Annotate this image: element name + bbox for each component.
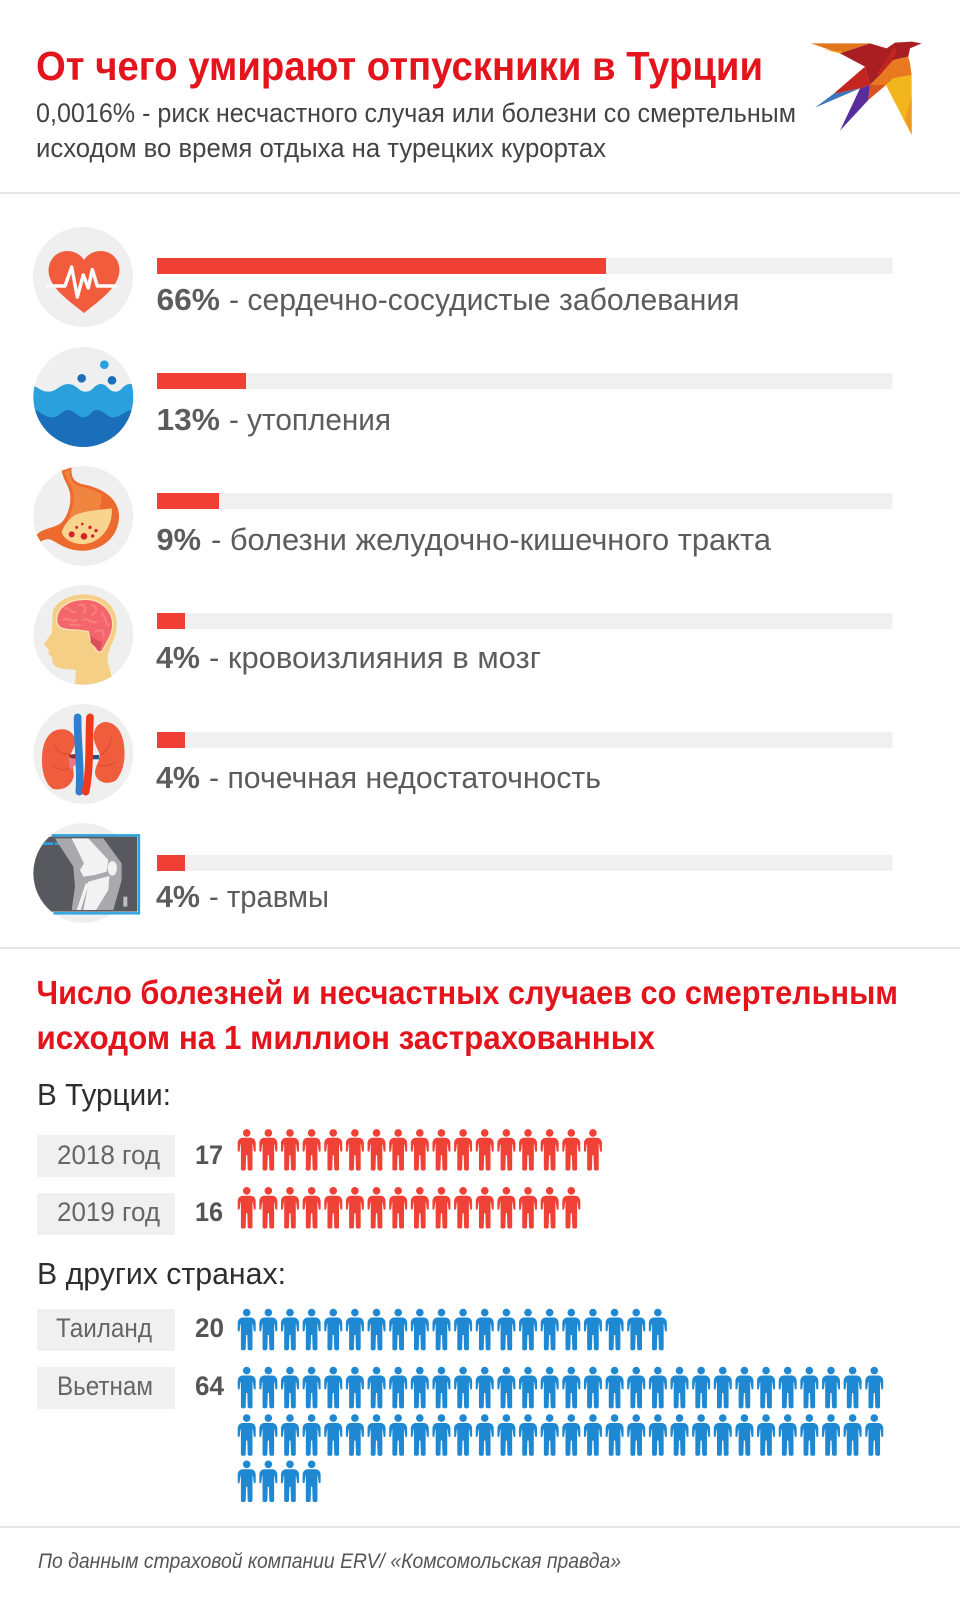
row: Vietnam	[37, 1367, 883, 1502]
value: 20: 20	[195, 1313, 224, 1343]
icon: brain	[33, 585, 133, 685]
bar: 4%	[157, 732, 892, 748]
label: 13%: 13%	[156, 402, 220, 437]
icon: swallow logo	[811, 42, 922, 135]
row: cardiovascular	[33, 227, 892, 327]
label: 9%: - болезни желудочно-кишечного тракта	[211, 522, 772, 557]
label box: 2018	[37, 1135, 175, 1177]
label: 66%: - сердечно-сосудистые заболевания	[229, 282, 740, 317]
row: gastrointestinal	[33, 466, 892, 566]
label box: Vietnam	[37, 1367, 175, 1409]
source note: По данным страховой компании ERV/ «Комсомольская правда»	[38, 1550, 621, 1573]
label: 4%: - травмы	[209, 879, 329, 914]
label box: Thailand	[37, 1309, 175, 1351]
bar: 9%	[157, 493, 892, 509]
row: 2019	[37, 1187, 580, 1235]
pictogram: 20 people	[238, 1309, 667, 1350]
label box: 2019: 2019 год	[57, 1197, 160, 1227]
row: Thailand	[37, 1309, 667, 1351]
subheading: Turkey: В Турции:	[37, 1077, 171, 1112]
label: 4%: 4%	[156, 760, 200, 795]
subtitle: 0,0016% - риск несчастного случая или болезни со смертельным	[36, 98, 796, 128]
header	[36, 42, 922, 163]
label: 4%: - кровоизлияния в мозг	[209, 640, 541, 675]
icon: water	[30, 347, 135, 450]
pictogram: 64 people	[238, 1367, 883, 1502]
panel: causes of death	[30, 227, 892, 923]
label box: 2018: 2018 год	[57, 1140, 160, 1170]
label: 13%: - утопления	[229, 402, 391, 437]
icon: knee x-ray	[33, 823, 139, 923]
value: 64: 64	[195, 1371, 224, 1401]
pictogram: 17 people	[238, 1129, 602, 1171]
row: 2018	[37, 1129, 602, 1177]
label: 13%	[156, 402, 391, 437]
row: brain hemorrhage	[33, 585, 892, 685]
icon: kidneys	[33, 704, 133, 804]
subheading: other countries: В других странах:	[37, 1256, 286, 1291]
label: 4%: - почечная недостаточность	[209, 760, 601, 795]
label box: 2019	[37, 1193, 175, 1235]
heading: deaths per million	[36, 974, 898, 1056]
subtitle	[36, 98, 796, 163]
bar: 13%	[157, 373, 892, 389]
value: 16: 16	[195, 1197, 223, 1227]
label box: Thailand: Таиланд	[56, 1313, 152, 1343]
row: injuries	[33, 823, 892, 923]
heading: deaths per million: Число болезней и несчастных случаев со смертельным	[36, 974, 898, 1011]
label box: Vietnam: Вьетнам	[57, 1371, 153, 1401]
label: 9%: 9%	[156, 522, 201, 557]
label: 4%	[156, 879, 329, 914]
icon: stomach	[33, 466, 133, 566]
bar: 4%	[157, 855, 892, 871]
bar: 4%	[157, 613, 892, 629]
label: 4%: 4%	[156, 640, 200, 675]
label: 66%: 66%	[156, 282, 220, 317]
value: 17: 17	[195, 1140, 223, 1170]
row: drowning	[30, 347, 892, 450]
subtitle: исходом во время отдыха на турецких курортах	[36, 133, 606, 163]
bar: 66%	[157, 258, 892, 274]
title: От чего умирают отпускники в Турции	[36, 43, 763, 89]
icon: heart	[33, 227, 133, 327]
row: kidney failure	[33, 704, 892, 804]
heading: deaths per million: исходом на 1 миллион застрахованных	[36, 1019, 656, 1056]
label: 4%: 4%	[156, 879, 200, 914]
pictogram: 16 people	[238, 1187, 580, 1229]
